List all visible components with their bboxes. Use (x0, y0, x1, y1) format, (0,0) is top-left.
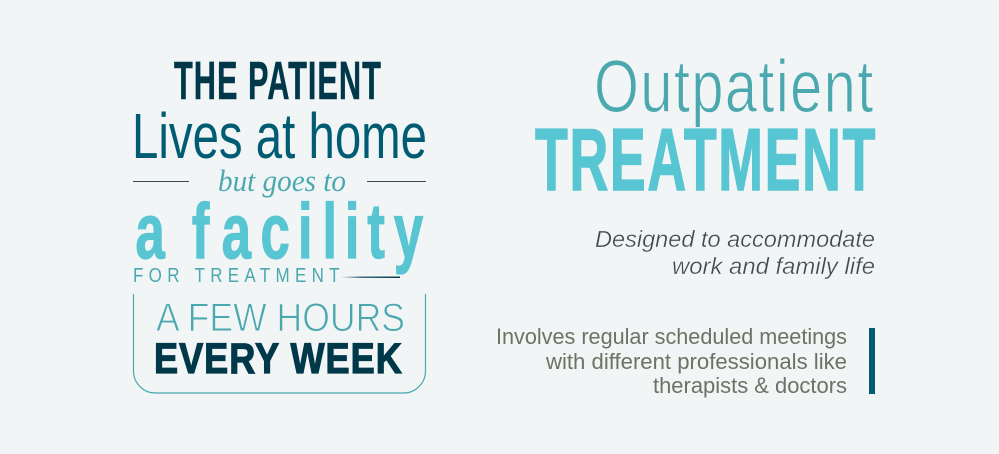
text: for treatment: FOR TREATMENT (133, 264, 340, 286)
text: involves regular meetings (496, 324, 847, 398)
title: outpatient: Outpatient (594, 46, 873, 129)
accent stroke (341, 276, 400, 278)
panel: time callout box (134, 294, 426, 393)
panel: patient typographic lockup (0, 51, 427, 393)
text: a few hours: A FEW HOURS (156, 296, 405, 340)
title: treatment: TREATMENT (535, 112, 875, 209)
text: designed to accommodate: Designed to accommodate (595, 226, 875, 252)
text: involves regular meetings: therapists & doctors (653, 373, 847, 398)
panel: outpatient description (496, 46, 875, 398)
text: work and family life: work and family life (672, 253, 875, 279)
accent bar (869, 328, 875, 394)
divider: left rule (133, 181, 189, 182)
emphasis text: a facility: a facility (0, 189, 423, 276)
text: involves regular meetings: with different professionals like (545, 349, 847, 374)
divider: right rule (367, 181, 426, 182)
text: involves regular meetings: Involves regular scheduled meetings (496, 324, 847, 349)
heading: the patient: THE PATIENT (174, 51, 381, 111)
text: lives at home: Lives at home (132, 100, 427, 172)
script text: but goes to: but goes to (218, 163, 346, 198)
text: every week: EVERY WEEK (154, 335, 402, 383)
